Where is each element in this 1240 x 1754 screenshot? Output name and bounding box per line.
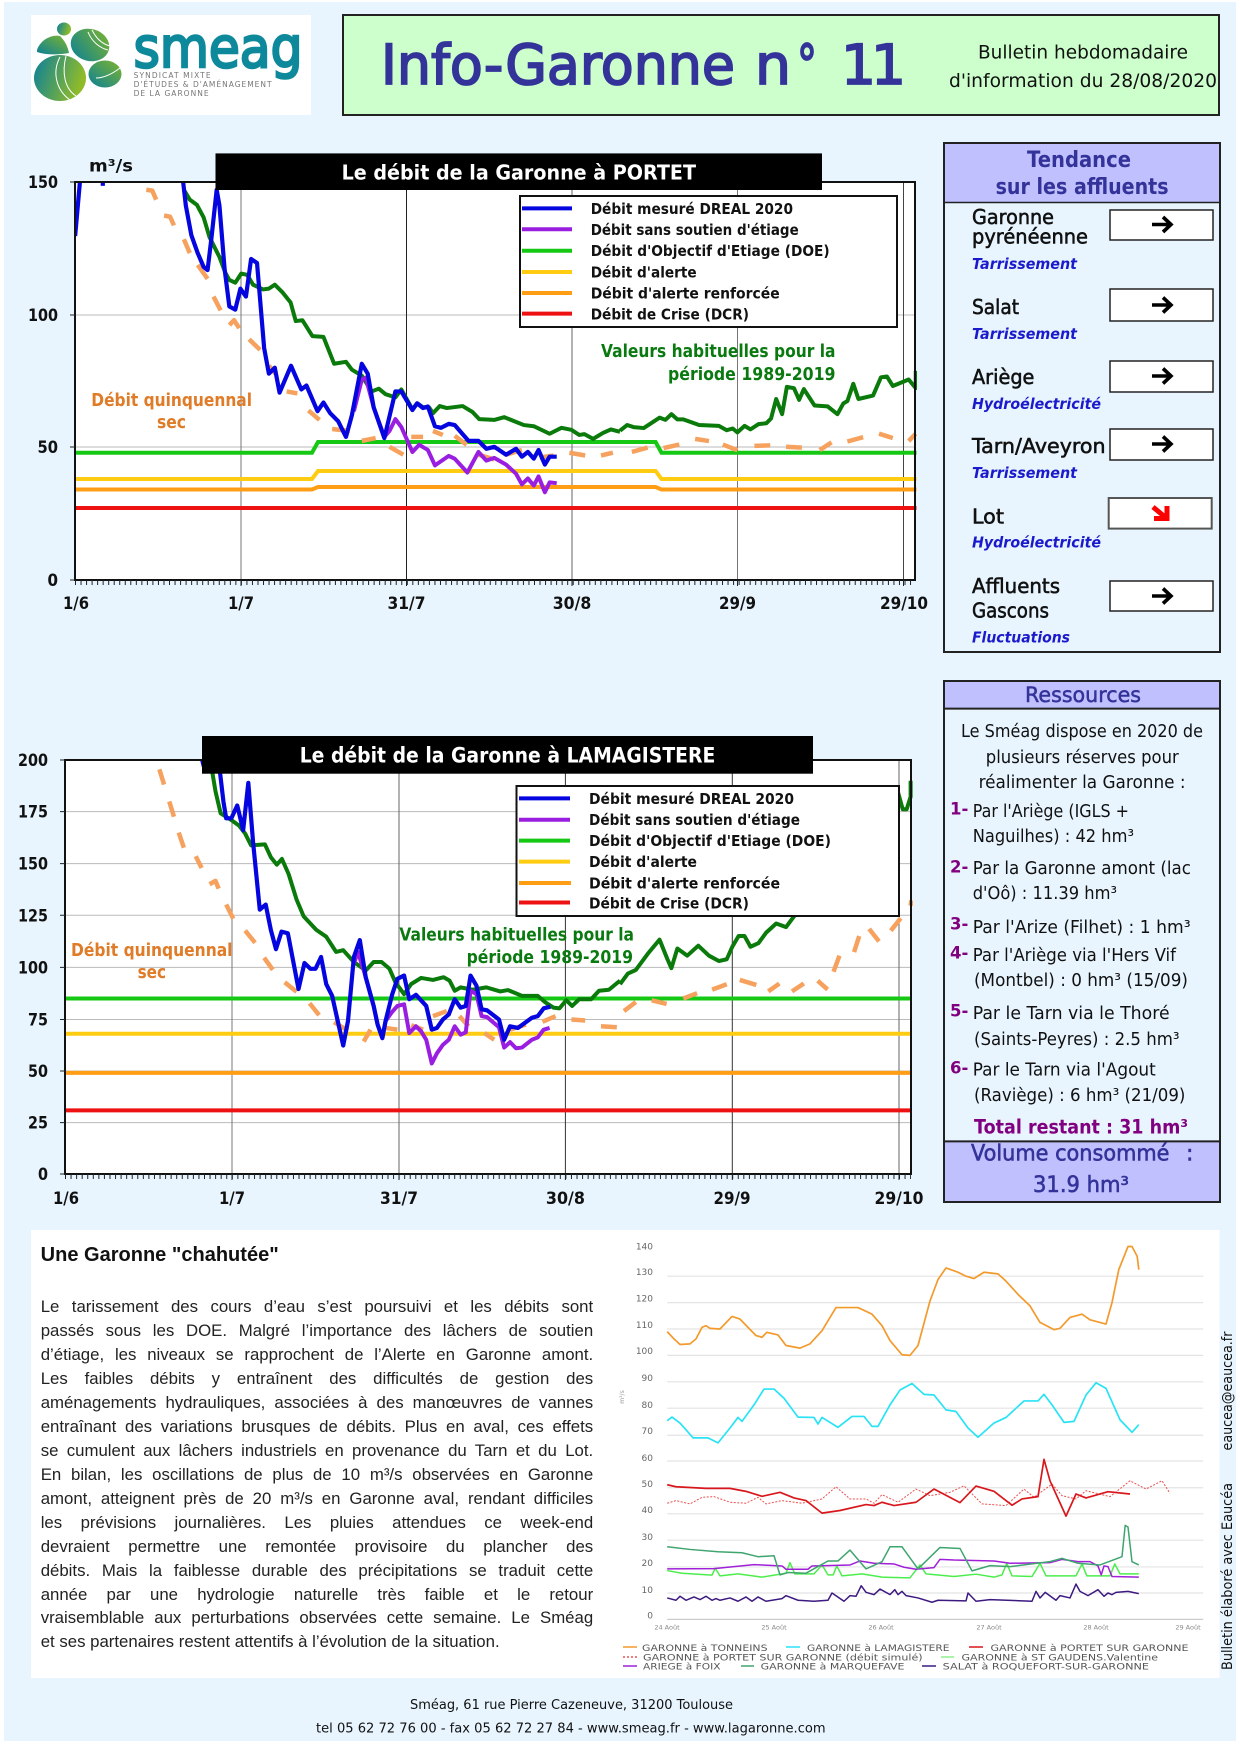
annotation: débit quinquennal sec: Débit quinquennal [91,390,252,411]
x axis labels: 29/10 [880,594,928,613]
text block: commentary paragraph: année par une hydrologie naturelle très faible et le retour [41,1585,593,1604]
reserve list: Par l'Arize (Filhet) : 1 hm³ [973,918,1191,938]
arrow boxes [1109,210,1213,611]
logo: smeag: SYNDICAT MIXTE [134,71,211,80]
chart legend: GARONNE à ST GAUDENS.Valentine [962,1654,1158,1664]
annotation: débit quinquennal sec: sec [157,412,186,433]
x axis labels: 26 Août [868,1624,894,1632]
chart legend [623,1644,1188,1672]
legend: Débit de Crise (DCR) [591,306,749,324]
legend: Débit d'alerte renforcée [591,284,780,302]
annotation: valeurs habituelles [399,925,634,968]
heading: Une Garonne chahutée: Une Garonne "chahutée" [41,1244,279,1266]
threshold lines [75,442,916,508]
logo: smeag [31,15,311,115]
chart legend: GARONNE à PORTET SUR GARONNE (débit simulé) [643,1652,923,1664]
reserve list [973,802,1191,1106]
y axis labels: 100 [18,958,48,978]
affluent names: Ariège [972,365,1034,389]
logo: smeag: D'ÉTUDES & D'AMÉNAGEMENT [134,80,272,89]
intro text: Le Sméag dispose en 2020 de [961,722,1203,742]
plotted curves [75,178,916,492]
y axis labels: 150 [28,173,58,193]
text block: commentary paragraph: passés sous les DOE. Malgré l’importance des lâchers de soutien [41,1321,593,1340]
y axis labels: 75 [28,1010,48,1030]
chart title bar: Le débit de la Garonne à PORTET [342,160,696,184]
y axis labels: 20 [642,1559,653,1569]
affluent names: Gascons [972,598,1049,622]
reserve list: Par la Garonne amont (lac [973,859,1191,879]
legend: Débit de Crise (DCR) [589,894,749,912]
legend: Débit d'alerte [589,853,697,871]
affluent names: pyrénéenne [972,225,1088,249]
annotation: débit quinquennal sec: Débit quinquennal [71,940,232,961]
subtitle: bulletin date [949,42,1217,92]
x axis labels: 30/8 [546,1189,585,1208]
numbered markers: 2- [950,858,968,876]
reserve list: (Saints-Peyres) : 2.5 hm³ [974,1030,1180,1050]
chart legend: GARONNE à PORTET SUR GARONNE [990,1644,1188,1654]
y axis labels: 25 [28,1114,48,1134]
volume consommé: 31.9 hm³ [1033,1173,1129,1198]
side credit: rotated text: Bulletin élaboré avec Eaucéa [1220,1483,1236,1670]
annotation: valeurs habituelles: Valeurs habituelles pour la [601,341,836,362]
legend: Débit d'alerte renforcée [589,874,780,892]
y axis labels: 125 [18,906,48,926]
y axis labels: 80 [642,1401,653,1411]
x axis labels: 1/7 [219,1189,245,1208]
affluent names: Salat [972,295,1019,319]
text block: commentary paragraph: amont, atteignent près de 20 m³/s en Garonne aval, rendant difficiles [41,1489,593,1508]
y axis labels: 140 [636,1242,653,1252]
plotted curves [159,757,911,1063]
reserve list: d'Oô) : 11.39 hm³ [973,884,1117,904]
affluent names: Lot [972,504,1004,528]
affluent names: Garonne [972,205,1054,229]
text block: commentary paragraph: En bilan, les oscillations de plus de 10 m³/s observées en Garonne [41,1465,593,1484]
y axis labels: 100 [28,306,58,326]
reserve list: Par l'Ariège via l'Hers Vif [973,946,1177,966]
y axis labels: 70 [642,1427,653,1437]
trend descriptions: Fluctuations [972,629,1070,647]
numbered markers: 3- [950,915,968,934]
legend: Débit d'Objectif d'Etiage (DOE) [591,242,830,260]
text block: commentary paragraph [41,1297,593,1651]
panel: tendance sur les affluents [944,143,1220,652]
y axis labels: 200 [18,751,48,771]
axes [65,760,911,1174]
text block: commentary paragraph: les prévisions journalières. Les pluies attendues ce week-end [41,1513,593,1532]
intro text: réalimenter la Garonne : [979,773,1186,793]
annotation: valeurs habituelles: Valeurs habituelles pour la [399,925,634,946]
numbered markers [950,800,968,1078]
y axis labels: 175 [18,803,48,823]
numbered markers: 5- [950,1001,968,1020]
y axis labels: 0 [38,1165,48,1185]
affluent names [971,205,1106,623]
y axis labels: 30 [642,1533,653,1543]
intro text [961,722,1203,793]
title: Info-Garonne [381,33,735,97]
text block: commentary paragraph: vraisemblable aux perturbations observées cette semaine. Le Sméag [41,1608,593,1627]
y axis labels: 60 [642,1454,653,1464]
x axis labels: 29/9 [719,594,756,613]
footer: address [316,1697,826,1737]
legend: Débit d'Objectif d'Etiage (DOE) [589,832,831,850]
trend descriptions [972,255,1101,647]
text block: commentary paragraph: Le tarissement des cours d’eau s’est poursuivi et les débits sont [41,1297,593,1316]
text block: commentary paragraph: se cumulent aux lâchers industriels en provenance du Tarn et du Lot. [41,1441,593,1460]
legend: Débit mesuré DREAL 2020 [589,790,794,808]
unit label: m³/s [89,157,133,177]
chart legend: SALAT à ROQUEFORT-SUR-GARONNE [943,1662,1149,1672]
chart title bar: Le débit de la Garonne à LAMAGISTERE [300,744,715,768]
icon: red arrow down-right [1153,506,1167,518]
y axis labels: 110 [636,1321,653,1331]
reserve list: (Raviège) : 6 hm³ (21/09) [974,1086,1185,1106]
x axis labels: 29/10 [874,1189,924,1208]
legend [520,196,897,327]
trend descriptions: Tarrissement [972,325,1078,343]
legend: Débit sans soutien d'étiage [591,221,799,239]
intro text: plusieurs réserves pour [986,748,1180,768]
reserve list: Par le Tarn via le Thoré [973,1004,1170,1024]
annotation: débit quinquennal sec [91,390,252,433]
panel: ressources [944,681,1220,1202]
panel: text and hydrograph background [31,1230,1220,1678]
numbered markers: 1- [950,800,968,819]
x axis labels [654,1624,1201,1632]
heading: sur les affluents [996,175,1169,200]
x axis labels: 27 Août [976,1624,1002,1632]
trend descriptions: Tarrissement [972,255,1078,273]
x axis labels [63,594,928,613]
y axis labels: 130 [636,1268,653,1278]
reserve list: Par le Tarn via l'Agout [973,1060,1156,1080]
text block: commentary paragraph: et ses partenaires restent attentifs à l’évolution de la situation. [41,1632,500,1651]
heading [996,148,1169,200]
volume consommé: : [1186,1142,1193,1167]
heading: Ressources [1025,683,1141,707]
title: 1 [841,33,876,97]
trend descriptions: Tarrissement [972,464,1078,482]
legend: Débit sans soutien d'étiage [589,811,800,829]
total restant: Total restant : 31 hm³ [974,1116,1188,1139]
y axis labels [636,1242,653,1621]
title: ° [797,33,817,97]
affluent names: Affluents [972,574,1060,598]
text block: commentary paragraph: aménagements hydrauliques, associées à des manœuvres de vannes [41,1393,593,1412]
reserve list: (Montbel) : 0 hm³ (15/09) [974,971,1188,991]
annotation: débit quinquennal sec [71,940,232,983]
axes [75,182,915,580]
y axis labels: 90 [642,1374,653,1384]
title: 1 [871,33,906,97]
x axis labels: 1/6 [63,594,89,613]
text block: commentary paragraph: devraient permettre une remontée provisoire du plancher des [41,1537,593,1556]
x axis labels: 29/9 [714,1189,750,1208]
subtitle: bulletin date: Bulletin hebdomadaire [978,42,1188,64]
y axis labels: 120 [636,1295,653,1305]
y axis labels: 40 [642,1506,653,1516]
chart: débit Lamagistère [18,736,924,1208]
chart title bar [216,153,822,190]
y axis labels: 50 [28,1062,48,1082]
volume consommé [971,1142,1193,1198]
annotation: valeurs habituelles: période 1989-2019 [668,364,836,385]
legend: Débit mesuré DREAL 2020 [591,200,793,218]
x axis labels: 31/7 [380,1189,418,1208]
side credit: rotated text: eaucea@eaucea.fr [1220,1331,1236,1450]
reserve list: Par l'Ariège (IGLS + [973,802,1129,822]
footer: address: Sméag, 61 rue Pierre Cazeneuve, 31200 Toulouse [410,1697,733,1713]
title [381,33,906,97]
y axis labels: 100 [636,1347,653,1357]
numbered markers: 4- [950,944,968,963]
y axis labels [18,751,48,1185]
trend descriptions: Hydroélectricité [972,534,1101,552]
reserve list: Naguilhes) : 42 hm³ [973,827,1134,847]
subtitle: bulletin date: d'information du 28/08/2020 [949,70,1217,92]
chart: débit Portet [28,153,928,613]
x axis labels: 30/8 [553,594,591,613]
logo: smeag: DE LA GARONNE [134,89,209,98]
chart legend: GARONNE à TONNEINS [642,1644,768,1654]
y axis labels: 0 [647,1611,653,1621]
line chart: débits par station [619,1242,1203,1672]
chart legend: GARONNE à LAMAGISTERE [807,1644,950,1654]
x axis labels: 1/7 [228,594,254,613]
y axis labels: 50 [642,1480,653,1490]
title box [343,15,1219,115]
annotation: valeurs habituelles: période 1989-2019 [467,947,633,968]
chart legend: GARONNE à MARQUEFAVE [761,1662,904,1672]
text block: commentary paragraph: Les faibles débits y entraînent des difficultés de gestion des [41,1369,593,1388]
icon: trend arrows [1152,217,1171,604]
text block: commentary paragraph: débits. Mais la faiblesse durable des précipitations se traduit cette [41,1561,593,1580]
legend: Débit d'alerte [591,264,697,282]
title: n [755,33,791,97]
trend descriptions: Hydroélectricité [972,395,1101,413]
text block: commentary paragraph: entraînant des variations brusques de débits. Plus en aval, ces effets [41,1417,593,1436]
threshold lines [65,998,912,1110]
x axis labels: 24 Août [654,1624,680,1632]
x axis labels: 25 Août [761,1624,787,1632]
y axis labels: 150 [18,855,48,875]
y axis labels [28,173,58,591]
side credit: rotated text [1220,1331,1236,1670]
y axis labels: 50 [38,438,58,458]
legend [516,786,899,916]
logo: smeag: smeag [134,16,303,81]
x axis labels [53,1189,924,1208]
affluent names: Tarn/Aveyron [971,434,1106,458]
chart title bar [202,736,813,774]
numbered markers: 6- [950,1059,968,1078]
volume consommé: Volume consommé [971,1142,1170,1167]
heading: Tendance [1027,148,1131,173]
y axis labels: 0 [48,571,58,591]
x axis labels: 31/7 [388,594,426,613]
x axis labels: 28 Août [1083,1624,1109,1632]
annotation: valeurs habituelles [601,341,836,385]
annotation: débit quinquennal sec: sec [138,962,166,983]
x axis labels: 1/6 [53,1189,79,1208]
x axis labels: 29 Août [1175,1624,1201,1632]
text block: commentary paragraph: d’étiage, les niveaux se rapprochent de l’Alerte en Garonne amont. [41,1345,593,1364]
unit label: m³/s [619,1390,626,1404]
chart legend: ARIEGE à FOIX [643,1662,721,1672]
footer: address: tel 05 62 72 76 00 - fax 05 62 72 27 84 - www.smeag.fr - www.lagaronne.com [316,1721,826,1737]
y axis labels: 10 [642,1586,653,1596]
